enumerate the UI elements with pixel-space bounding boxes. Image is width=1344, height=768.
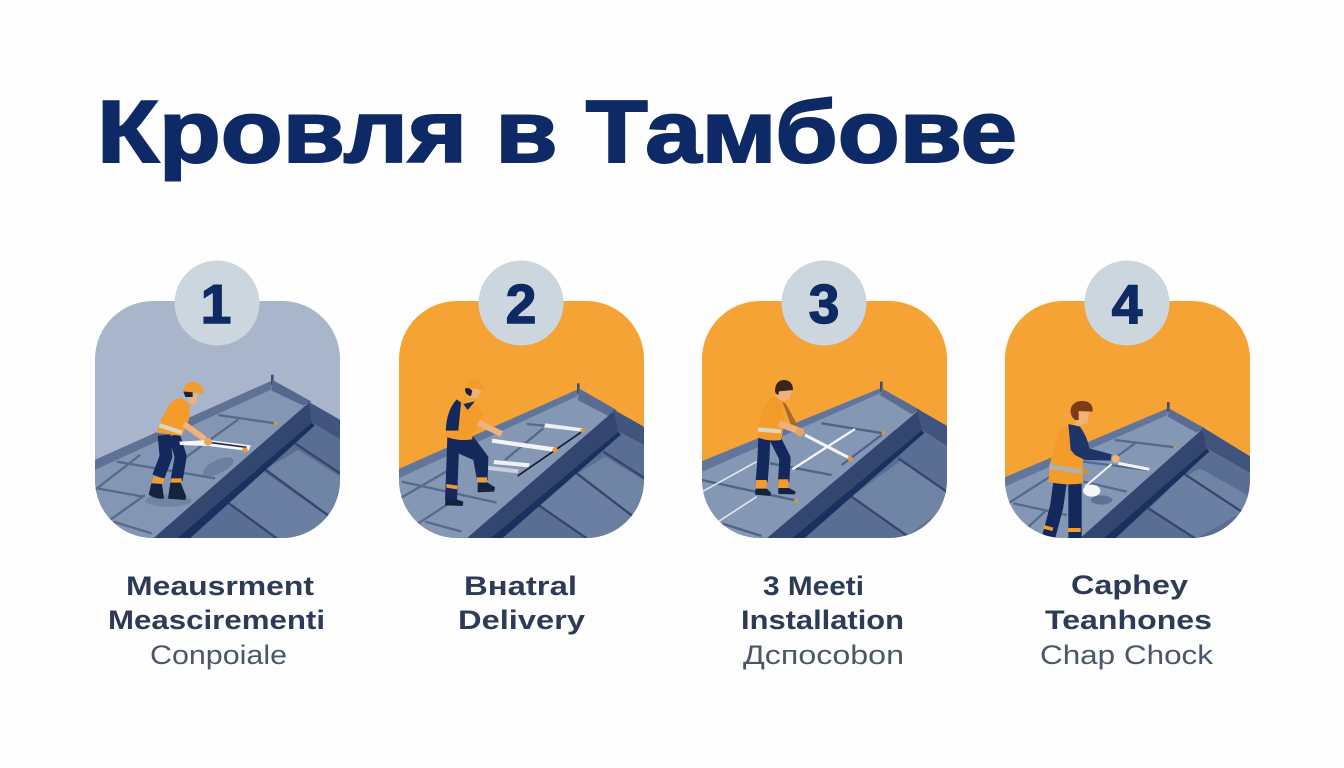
step 4 number badge: 4 <box>1112 273 1143 335</box>
step 1 caption: Meausrment <box>126 571 314 601</box>
step 3 caption: Installation <box>741 605 904 635</box>
step 4 caption <box>1040 570 1214 670</box>
title: Кровля в Тамбове <box>97 82 1017 181</box>
step 4 caption: Chap Chock <box>1040 640 1214 670</box>
step 1 caption: Соnpoiale <box>150 640 287 670</box>
panel: step 1 measurement <box>90 260 343 670</box>
scraper tool <box>1083 463 1149 497</box>
step 3 caption <box>741 571 904 670</box>
step 2 caption: Bнatral <box>464 571 577 601</box>
worker 2 <box>445 379 502 506</box>
step 4 number badge <box>1084 260 1170 346</box>
step 1 caption: Meascirementi <box>108 605 325 635</box>
step 4 caption: Caphey <box>1071 570 1188 600</box>
step 3 number badge <box>782 260 866 346</box>
worker 4 <box>1043 401 1120 538</box>
step 2 number badge: 2 <box>506 273 536 335</box>
worker 1 <box>149 382 251 500</box>
panel: step 4 teardown and check <box>1000 260 1253 670</box>
cross tool <box>792 429 855 469</box>
illustration: step 2 roof and worker <box>395 301 647 538</box>
step 1 caption <box>108 571 325 670</box>
illustration: step 1 roof and worker <box>90 301 343 538</box>
step 1 number badge <box>174 260 260 346</box>
step 1 number badge: 1 <box>201 273 231 335</box>
step 3 number badge: 3 <box>809 273 839 335</box>
step 4 caption: Teanhones <box>1045 605 1212 635</box>
illustration: step 3 roof and worker <box>698 301 950 538</box>
step 2 number badge <box>478 260 564 346</box>
worker 3 <box>755 380 804 496</box>
ladder tool <box>488 423 585 476</box>
illustration: step 4 roof and worker <box>1000 301 1253 538</box>
step 3 caption: 3 Meeti <box>763 571 864 601</box>
step 2 caption: Delivery <box>458 605 585 635</box>
panel: step 2 delivery <box>395 260 647 635</box>
step 3 caption: Дcпocobon <box>743 640 904 670</box>
panel: step 3 installation <box>698 260 950 670</box>
step 2 caption <box>458 571 585 635</box>
